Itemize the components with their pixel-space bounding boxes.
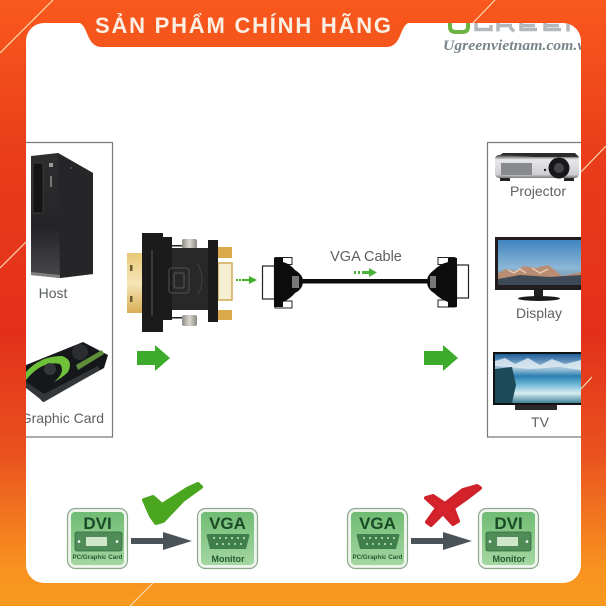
icon: projector <box>495 153 579 181</box>
TV label: TV <box>531 414 550 430</box>
graphic card label: Graphic Card <box>21 410 104 426</box>
projector label: Projector <box>510 183 566 199</box>
arrow: large green left <box>137 345 170 371</box>
right connector <box>427 258 468 307</box>
display label: Display <box>516 305 562 321</box>
badge: DVI monitor <box>478 508 538 568</box>
badge: DVI monitor: DVI <box>494 514 523 533</box>
cable label: VGA Cable <box>330 249 402 265</box>
badge: DVI PC: DVI <box>83 514 112 533</box>
icon: red cross <box>426 486 480 525</box>
badge: DVI monitor: Monitor <box>492 554 526 564</box>
panel: source devices <box>21 142 112 437</box>
title text: SẢN PHẨM CHÍNH HÃNG <box>95 13 391 38</box>
title banner <box>80 13 408 47</box>
icon: DVI to VGA adapter <box>127 233 232 332</box>
badge: DVI PC <box>68 508 128 568</box>
badge: VGA monitor: VGA <box>209 514 246 533</box>
logo <box>444 23 581 53</box>
host label: Host <box>39 285 67 301</box>
arrow: cable flow <box>354 268 377 277</box>
badge: VGA monitor <box>198 508 258 568</box>
panel: correct DVI to VGA <box>68 484 258 568</box>
arrow: large green right <box>424 345 458 371</box>
badge: VGA PC <box>348 508 408 568</box>
icon: check mark <box>144 484 201 523</box>
arrow: adapter flow <box>236 276 257 284</box>
icon: display monitor <box>495 237 581 301</box>
icon: TV <box>493 352 581 410</box>
icon: desktop computer <box>31 153 93 278</box>
badge: DVI PC: PC/Graphic Card <box>72 554 123 561</box>
panel: output devices <box>488 142 581 437</box>
badge: VGA monitor: Monitor <box>212 554 245 564</box>
icon: VGA cable <box>262 258 468 308</box>
badge: VGA PC: PC/Graphic Card <box>352 554 403 561</box>
badge: VGA PC: VGA <box>359 514 396 533</box>
arrow: dark grey <box>411 532 472 550</box>
left connector <box>262 258 303 308</box>
arrow: dark grey <box>131 532 192 550</box>
website text: Ugreenvietnam.com.vn <box>443 38 593 54</box>
cable <box>302 279 428 284</box>
icon: graphic card <box>26 342 108 402</box>
panel: incorrect VGA to DVI <box>348 486 538 568</box>
